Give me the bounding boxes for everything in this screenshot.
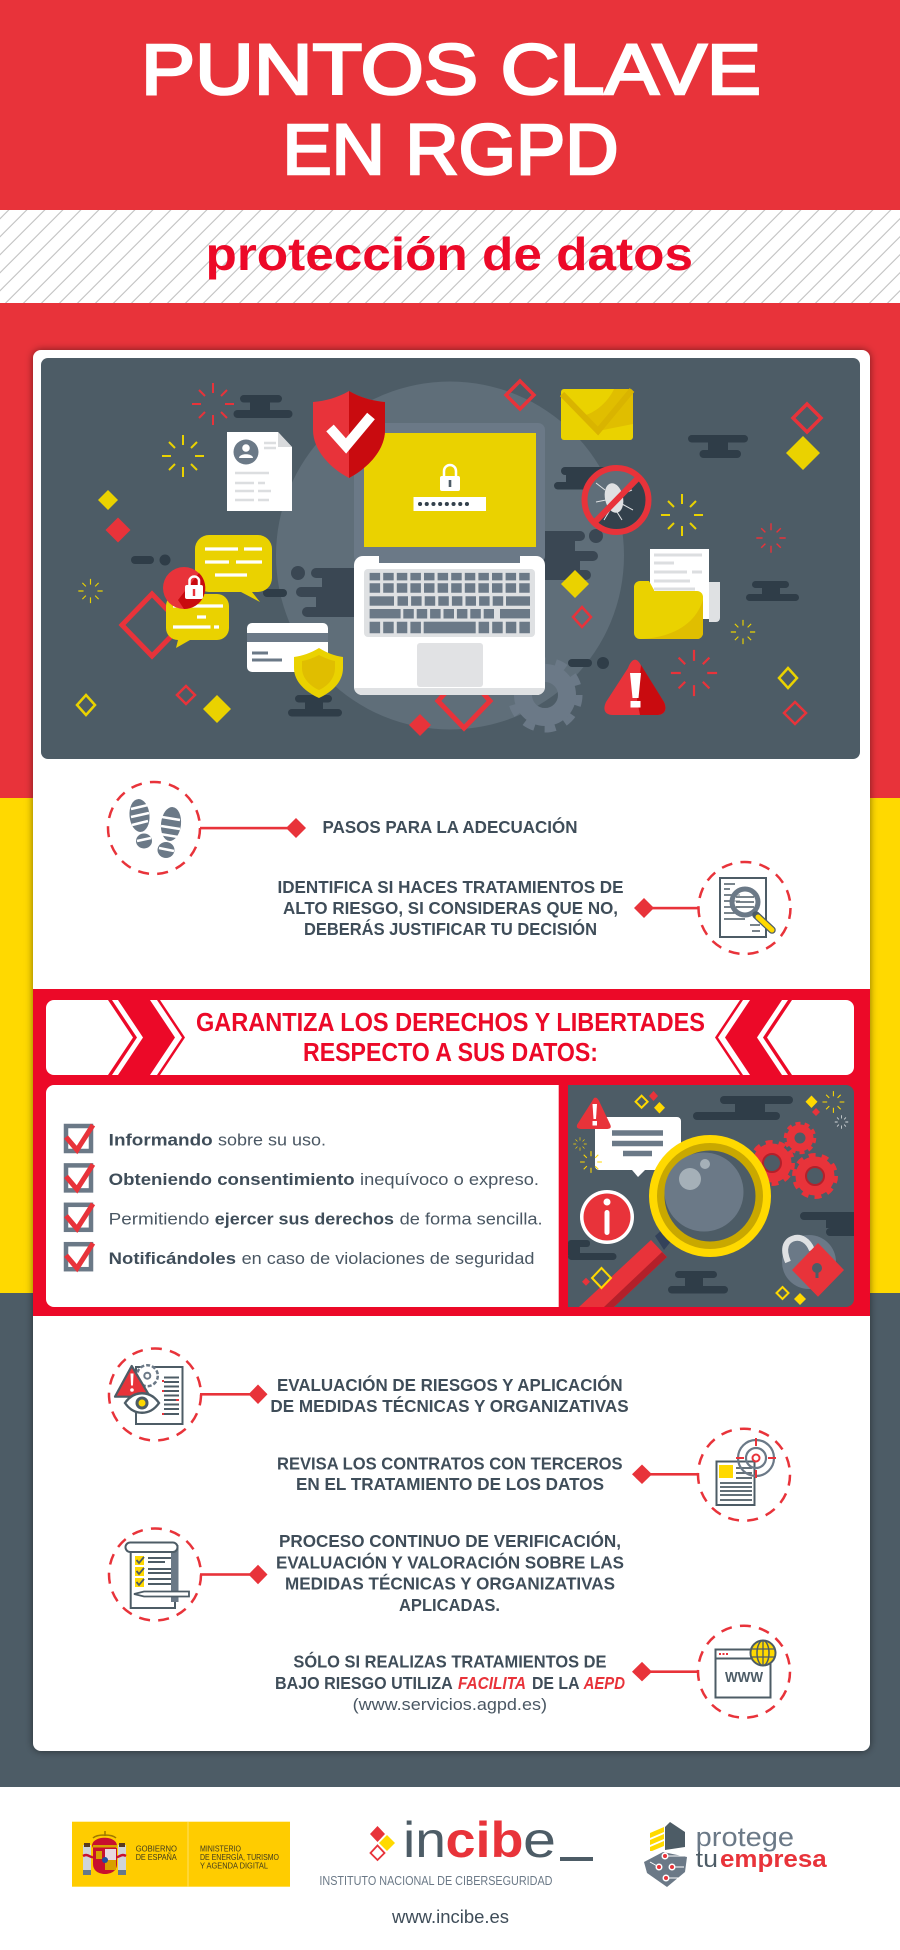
step: pasos para la adecuación [108, 782, 578, 874]
icon: warning triangle [604, 660, 665, 715]
item 3: Permitiendo [109, 1210, 209, 1228]
text [278, 877, 624, 939]
title: EN RGPD [282, 111, 618, 190]
item 3 [66, 1204, 543, 1230]
text: REVISA LOS CONTRATOS CON TERCEROS [277, 1453, 623, 1473]
icon: www window with globe: WWW [725, 1669, 764, 1686]
text: APLICADAS. [399, 1595, 500, 1615]
subtitle band: hatched strip with protección de datos: protección de datos [206, 228, 693, 280]
icon: footprints [108, 782, 200, 874]
subtitle band: hatched strip with protección de datos [0, 210, 900, 303]
text: AEPD [583, 1673, 625, 1693]
panel: garantiza los derechos [33, 989, 870, 1316]
text: EVALUACIÓN Y VALORACIÓN SOBRE LAS [276, 1551, 624, 1572]
item 2: Obteniendo consentimiento [109, 1170, 355, 1189]
text: DEBERÁS JUSTIFICAR TU DECISIÓN [304, 918, 597, 939]
icon: document with magnifier [698, 862, 790, 954]
logo: incibe: INSTITUTO NACIONAL DE CIBERSEGURIDAD [319, 1874, 552, 1888]
text [275, 1651, 625, 1714]
sparkle bursts [78, 383, 786, 696]
laptop [354, 423, 545, 695]
illustration: magnifier with gears [568, 1085, 854, 1307]
icon: chat bubbles with lock [163, 535, 272, 648]
dark background blobs [131, 395, 799, 716]
logo: protege tu empresa [644, 1822, 827, 1887]
connector [200, 818, 306, 838]
logo: gobierno de españa: DE ENERGÍA, TURISMO [200, 1852, 279, 1862]
step: identifica tratamientos [278, 862, 790, 954]
logo: incibe: e [523, 1812, 556, 1868]
icon: documents in folder [634, 549, 720, 639]
checklist [46, 1085, 559, 1307]
icon: checklist scroll [109, 1528, 201, 1620]
logo: protege tu empresa: empresa [720, 1846, 827, 1873]
connector [200, 1565, 268, 1584]
logo: incibe [319, 1812, 593, 1888]
logo: gobierno de españa [72, 1822, 290, 1887]
text [277, 1453, 623, 1494]
logo: gobierno de españa: Y AGENDA DIGITAL [200, 1860, 268, 1870]
connector [632, 1464, 698, 1484]
text: (www.servicios.agpd.es) [353, 1695, 547, 1714]
text: PROCESO CONTINUO DE VERIFICACIÓN, [279, 1530, 621, 1551]
banner [46, 1000, 854, 1075]
item 1: Informando [109, 1131, 213, 1150]
icon: risk document [109, 1348, 201, 1440]
text: EVALUACIÓN DE RIESGOS Y APLICACIÓN [277, 1374, 623, 1395]
icon: contract with target [698, 1429, 790, 1521]
text: PASOS PARA LA ADECUACIÓN [322, 816, 578, 837]
title [141, 31, 761, 190]
icon: no bug sign [584, 468, 648, 532]
connector [632, 1662, 698, 1681]
coat of arms [83, 1831, 126, 1875]
icon: red shield with check [313, 391, 385, 478]
item 4: en caso de violaciones de seguridad [242, 1249, 534, 1268]
step: bajo riesgo facilita [275, 1626, 790, 1718]
text: FACILITA [458, 1673, 526, 1693]
banner: RESPECTO A SUS DATOS: [303, 1039, 598, 1067]
gears [751, 1124, 836, 1197]
item 4: Notificándoles [109, 1249, 236, 1268]
icon: credit card with shield [247, 623, 343, 698]
step: revisa contratos [277, 1429, 790, 1521]
main white card [33, 350, 870, 1751]
logo: protege tu empresa: tu [696, 1846, 718, 1873]
item 1 [66, 1125, 326, 1151]
icon: www window with globe [698, 1626, 790, 1718]
text: DE MEDIDAS TÉCNICAS Y ORGANIZATIVAS [270, 1395, 629, 1416]
text: EN EL TRATAMIENTO DE LOS DATOS [296, 1474, 604, 1494]
text: SÓLO SI REALIZAS TRATAMIENTOS DE [293, 1651, 606, 1672]
text: DE LA [532, 1673, 580, 1693]
text [276, 1530, 624, 1615]
decorative diamonds [77, 381, 821, 736]
item 3: de forma sencilla. [400, 1210, 543, 1228]
text: IDENTIFICA SI HACES TRATAMIENTOS DE [278, 877, 624, 897]
banner: GARANTIZA LOS DERECHOS Y LIBERTADES [196, 1009, 705, 1037]
item 3: ejercer sus derechos [215, 1210, 394, 1228]
connector [634, 898, 698, 918]
panel: hero illustration [41, 358, 860, 759]
step: proceso continuo [109, 1528, 624, 1620]
logo: incibe: cib [446, 1812, 524, 1868]
logo: gobierno de españa: GOBIERNO [136, 1844, 177, 1854]
logo: incibe: in [403, 1812, 446, 1868]
logo: gobierno de españa: DE ESPAÑA [136, 1852, 177, 1862]
text [270, 1374, 629, 1416]
text: ALTO RIESGO, SI CONSIDERAS QUE NO, [283, 898, 618, 918]
icon: profile document [227, 432, 292, 511]
text: BAJO RIESGO UTILIZA [275, 1673, 453, 1693]
connector [200, 1384, 268, 1404]
title: PUNTOS CLAVE [141, 31, 761, 110]
icon: gear [511, 661, 579, 729]
step: evaluación de riesgos [109, 1348, 629, 1440]
item 2 [66, 1164, 539, 1190]
text: MEDIDAS TÉCNICAS Y ORGANIZATIVAS [285, 1573, 615, 1594]
item 4 [66, 1243, 534, 1269]
item 2: inequívoco o expreso. [360, 1170, 539, 1189]
logo: protege tu empresa: protege [696, 1822, 794, 1852]
item 1: sobre su uso. [218, 1131, 326, 1150]
icon: envelope [561, 389, 633, 440]
footer url: www.incibe.es [391, 1907, 509, 1927]
logo: gobierno de españa: MINISTERIO [200, 1844, 241, 1854]
